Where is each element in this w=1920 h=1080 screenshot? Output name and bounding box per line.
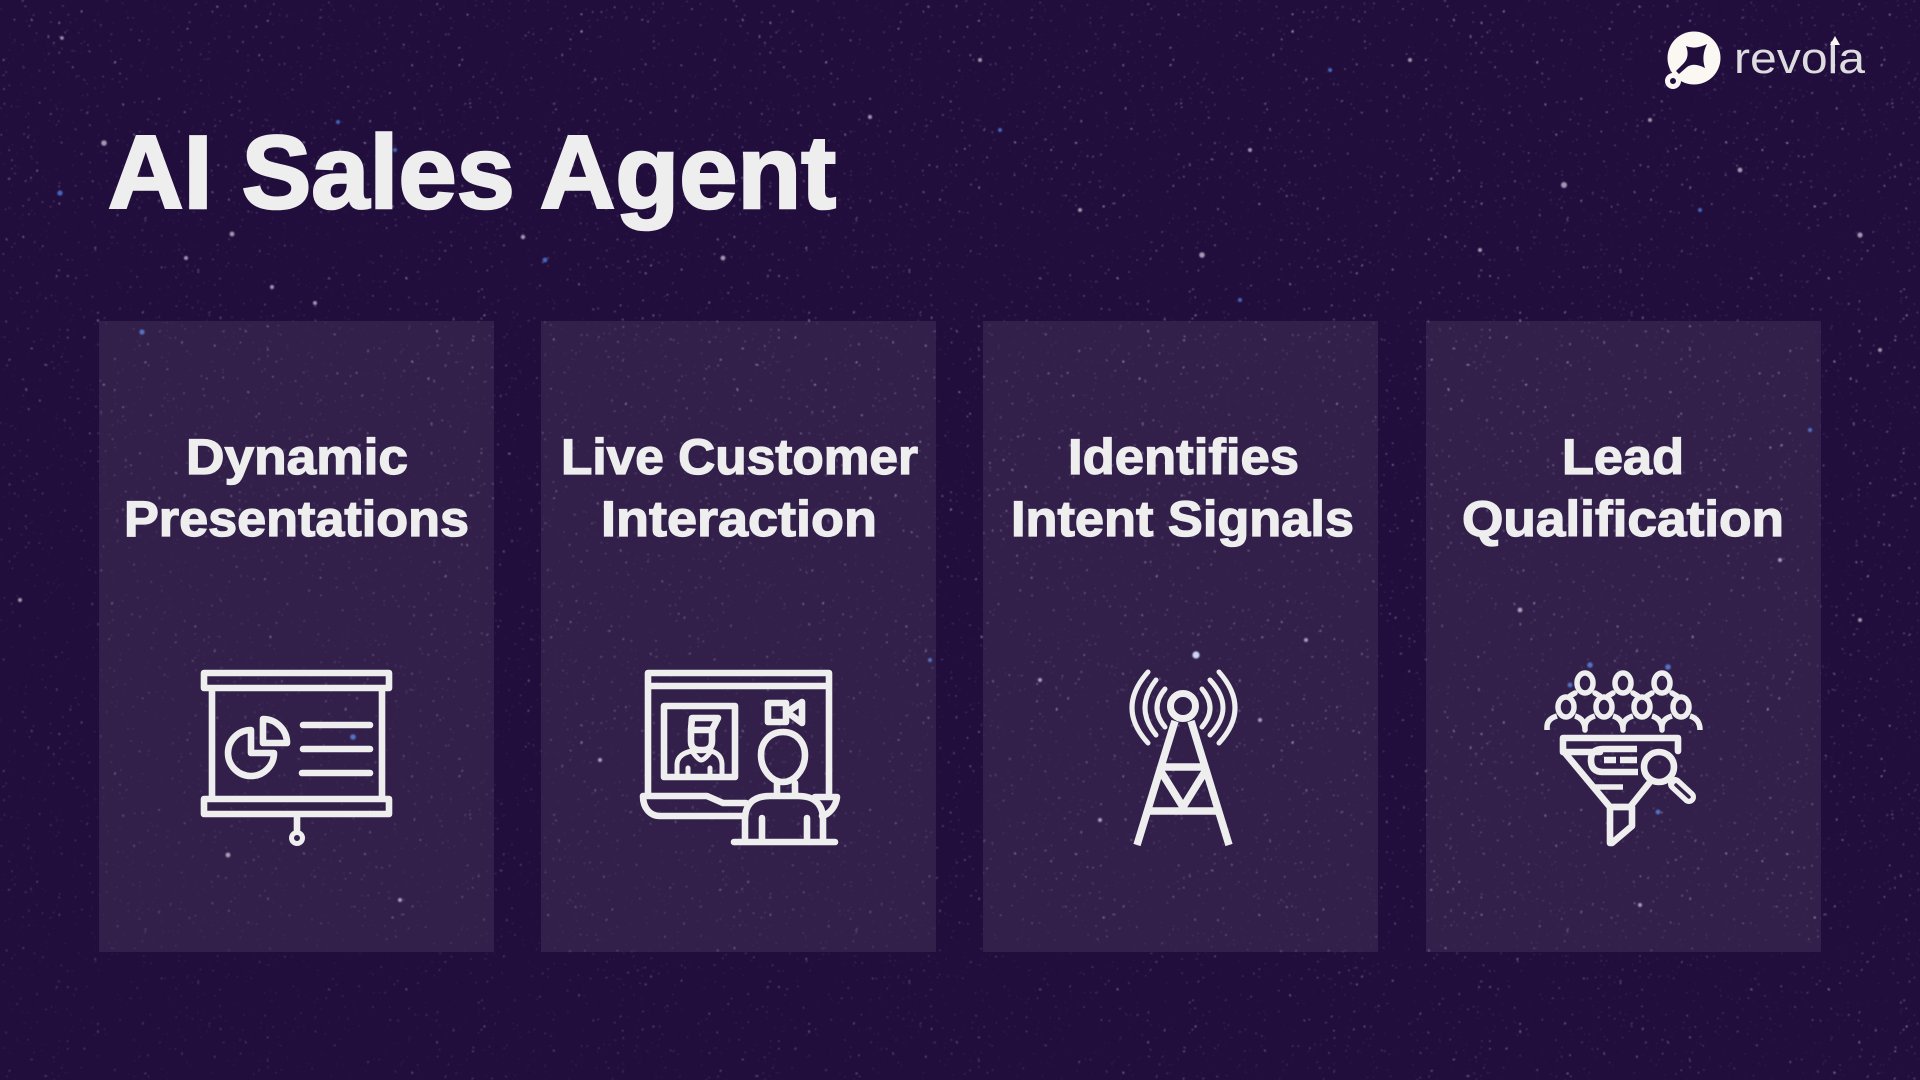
title: AI Sales Agent (108, 115, 836, 231)
heading: identifies intent signals: Identifies (1068, 429, 1299, 485)
icon: lead funnel with magnifier (1547, 673, 1700, 843)
heading: live customer interaction: Live Customer (561, 429, 918, 485)
panel: dynamic presentations (99, 321, 494, 952)
heading: lead qualification (1462, 429, 1784, 547)
icon: projector screen with pie chart (204, 673, 389, 844)
heading: dynamic presentations: Presentations (124, 491, 469, 547)
heading: identifies intent signals (1011, 429, 1354, 547)
heading: lead qualification: Qualification (1462, 491, 1784, 547)
icon: signal tower (1132, 672, 1235, 845)
panel: lead qualification (1426, 321, 1821, 952)
heading: dynamic presentations (124, 429, 469, 547)
heading: lead qualification: Lead (1562, 429, 1684, 485)
wordmark: revola (1734, 34, 1866, 83)
icon: video call on laptop (643, 673, 837, 842)
heading: live customer interaction: Interaction (601, 491, 877, 547)
icon: logo mark (1665, 32, 1720, 89)
star above tower (1192, 651, 1200, 659)
panel: live customer interaction (541, 321, 936, 952)
panel: identifies intent signals (983, 321, 1378, 952)
heading: live customer interaction (561, 429, 918, 547)
heading: identifies intent signals: Intent Signals (1011, 491, 1354, 547)
heading: dynamic presentations: Dynamic (186, 429, 408, 485)
logo: revola (1665, 32, 1866, 89)
